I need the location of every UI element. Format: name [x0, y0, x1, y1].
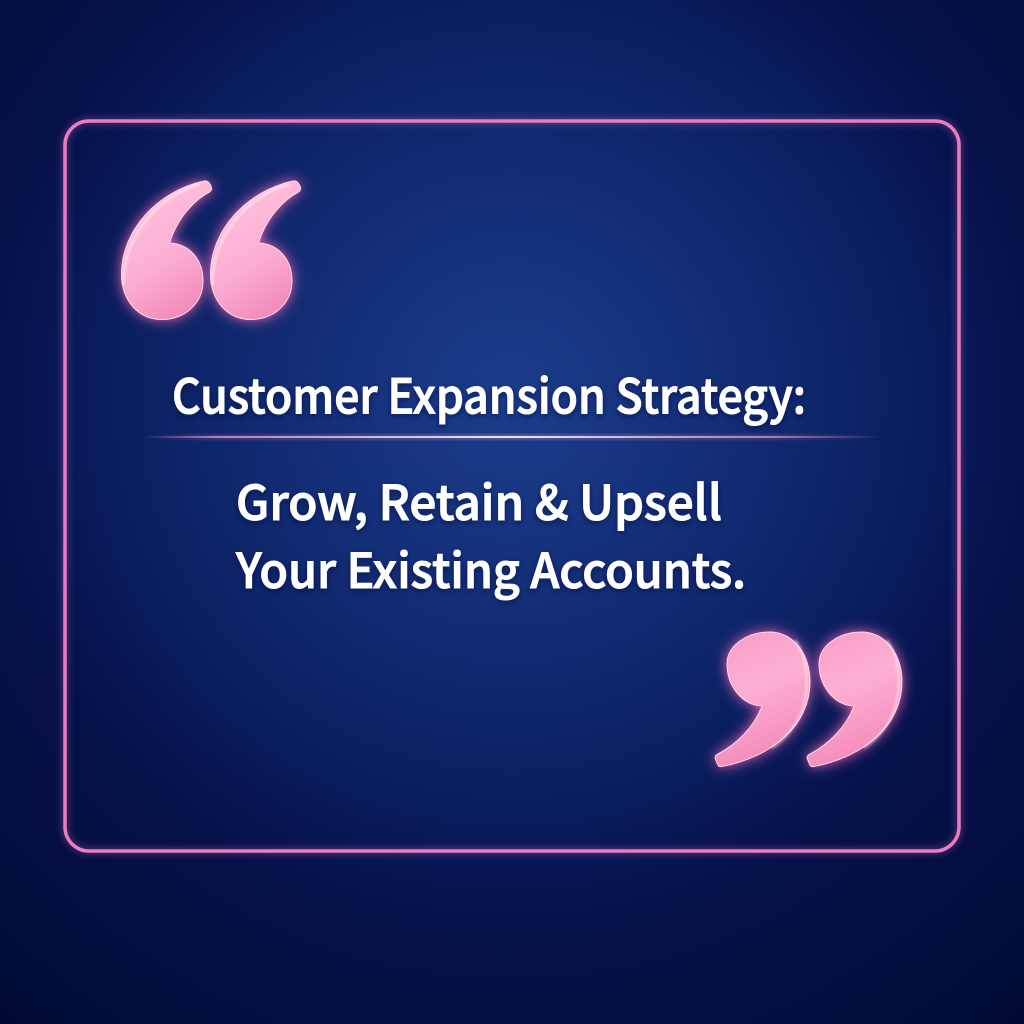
divider line: [143, 434, 880, 440]
panel: neon frame: [65, 121, 959, 851]
icon: opening quotation mark: [122, 181, 301, 320]
title: Customer Expansion Strategy: Customer Expansion Strategy:: [172, 358, 806, 428]
quote line 2: Your Existing Accounts.: [235, 532, 746, 602]
quote line 1: Grow, Retain & Upsell: [236, 464, 722, 534]
icon: closing quotation mark: [715, 632, 902, 767]
quote text: [235, 464, 746, 602]
